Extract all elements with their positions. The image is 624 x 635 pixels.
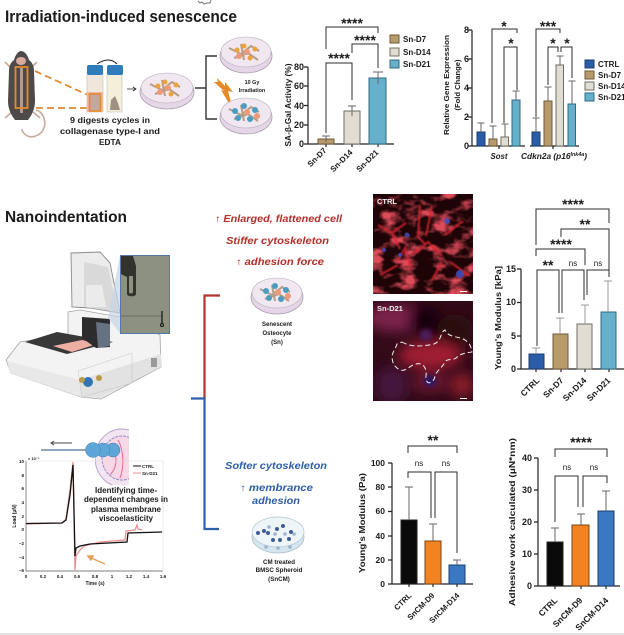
micrograph label CTRL: CTRL <box>377 197 397 206</box>
bars <box>547 511 614 586</box>
x labels <box>306 146 381 174</box>
significance brackets <box>492 18 572 123</box>
bracket: senescent branch <box>204 296 220 399</box>
caption: digest cycles: EDTA <box>99 137 121 147</box>
legend <box>133 464 158 476</box>
retraction arrow <box>51 441 72 445</box>
significance brackets: **** <box>354 32 376 48</box>
y axis ticks: 40 <box>294 101 304 111</box>
legend: senescence days: Sn-D21 <box>403 60 431 69</box>
icon: tubes <box>87 60 123 112</box>
indenter head <box>82 317 110 348</box>
text: spheroid phenotype: ↑ membrance <box>240 483 313 494</box>
micrograph: Sn-D21 <box>373 301 473 401</box>
y axis ticks: 40 <box>376 531 385 541</box>
caption: BMSC spheroid: (SnCM) <box>268 576 290 583</box>
x ticks: 1.4 <box>143 574 150 579</box>
caption: senescent osteocyte: Senescent <box>262 322 292 328</box>
significance brackets: ** <box>543 257 554 273</box>
y ticks: −6 <box>19 568 24 573</box>
legend: senescence days <box>390 35 431 69</box>
error bars <box>405 487 461 565</box>
error bars <box>551 491 610 542</box>
bracket: spheroid branch <box>191 398 219 529</box>
y axis ticks: 20 <box>522 517 532 527</box>
caption: BMSC spheroid: CM treated <box>263 559 295 566</box>
y axis ticks: 15 <box>506 264 516 274</box>
significance brackets: **** <box>341 15 363 31</box>
panel: isolation workflow <box>5 37 272 147</box>
y axis ticks: 80 <box>376 482 385 492</box>
significance brackets <box>555 434 607 522</box>
icon: control dish <box>220 37 272 73</box>
significance brackets: **** <box>550 236 572 252</box>
bar chart: Young's modulus Pa <box>358 432 473 625</box>
significance brackets: ** <box>428 432 439 448</box>
text: spheroid phenotype: adhesion <box>252 496 300 507</box>
icon: culture dish <box>140 73 194 109</box>
y axis ticks: 40 <box>522 453 532 463</box>
bars <box>477 65 576 146</box>
y axis ticks: 20 <box>376 555 385 565</box>
significance brackets: *** <box>540 18 557 34</box>
y axis ticks <box>464 25 469 151</box>
y axis ticks: 10 <box>506 297 516 307</box>
y axis ticks: 0 <box>380 579 385 589</box>
significance brackets: ** <box>580 216 591 232</box>
text: senescent phenotype: ↑ Enlarged, flattened cell <box>215 214 342 225</box>
y axis ticks <box>506 264 516 374</box>
bars <box>401 520 465 584</box>
y axis label: (Fold Change) <box>453 59 462 111</box>
caption: digest cycles <box>60 115 160 147</box>
connectors <box>83 377 93 387</box>
line chart: load versus time: Load (µN) <box>12 504 18 528</box>
caption: BMSC spheroid: BMSC Spheroid <box>256 567 303 574</box>
x ticks: 0.6 <box>74 574 81 579</box>
zoom wedge <box>108 255 120 333</box>
micrograph label Sn-D21: Sn-D21 <box>377 304 403 313</box>
text: senescent phenotype <box>215 214 342 268</box>
significance brackets: ns <box>590 463 598 472</box>
significance brackets: **** <box>328 50 350 66</box>
x labels <box>491 152 587 161</box>
series: Sn-D21 <box>26 462 142 570</box>
significance brackets <box>408 432 457 553</box>
y axis ticks: 4 <box>464 83 469 93</box>
significance brackets: ns <box>563 463 571 472</box>
x labels: CTRL <box>536 595 559 618</box>
error bars <box>478 56 576 139</box>
arrow to dish <box>127 87 136 91</box>
y axis ticks: 2 <box>464 112 469 122</box>
y ticks: −2 <box>19 541 24 546</box>
y axis ticks: 0 <box>511 364 516 374</box>
y ticks: 2 <box>21 514 24 519</box>
text: senescent phenotype: ↑ adhesion force <box>236 257 324 268</box>
inset microscope view <box>120 256 170 334</box>
y axis ticks: 60 <box>294 81 304 91</box>
caption: senescent osteocyte: Osteocyte <box>262 331 292 337</box>
x labels: SnCM-D9 <box>406 591 437 622</box>
caption: viscoelasticity: viscoelasticity <box>99 514 154 523</box>
error bars <box>322 72 383 142</box>
x labels: SnCM-D14 <box>427 591 462 625</box>
sample deck <box>25 332 113 354</box>
y axis ticks: 6 <box>464 54 469 64</box>
x labels: Cdkn2a (p16 <box>521 152 567 161</box>
caption: viscoelasticity: plasma membrane <box>91 505 162 514</box>
line chart: load versus time: × 10⁻³ <box>28 456 40 461</box>
legend: gene expression groups <box>585 60 624 102</box>
x labels: Sn-D21 <box>355 148 381 174</box>
icon: lightning bolt <box>214 78 233 110</box>
significance brackets <box>326 15 378 133</box>
icon: BMSC spheroid dish <box>252 517 304 553</box>
series: CTRL <box>26 465 162 556</box>
x labels: ) <box>583 152 587 161</box>
dashed lines from mouse to tube <box>35 71 88 108</box>
x labels: Sn-D14 <box>329 148 355 174</box>
x labels: Ink4a <box>571 152 584 158</box>
caption: BMSC spheroid <box>256 559 303 583</box>
y axis ticks <box>294 62 304 149</box>
icon: mouse <box>5 51 45 137</box>
y axis ticks: 0 <box>527 581 532 591</box>
y ticks: 4 <box>21 500 24 505</box>
significance brackets: * <box>564 35 570 51</box>
y axis ticks: 20 <box>294 120 304 130</box>
bar chart: adhesive work <box>507 434 620 632</box>
y axis ticks: 80 <box>294 62 304 72</box>
y ticks: −4 <box>19 555 24 560</box>
label: 10 Gy irradiation <box>239 80 265 94</box>
dashed cell outline <box>392 330 472 383</box>
cell <box>95 428 129 485</box>
x ticks: 0.2 <box>40 574 47 579</box>
icon: irradiated dish <box>220 98 272 134</box>
x ticks: 1.2 <box>126 574 133 579</box>
x labels: SnCM-D9 <box>551 595 585 629</box>
bar chart: relative gene expression <box>442 18 587 161</box>
y axis ticks: 60 <box>376 506 385 516</box>
x labels <box>392 591 462 625</box>
title: irradiation-induced senescence: Irradiation-induced senescence <box>5 7 237 26</box>
error bars <box>532 281 612 354</box>
significance brackets: ns <box>442 459 450 468</box>
y axis ticks: 8 <box>464 25 469 35</box>
y axis ticks: 0 <box>464 141 469 151</box>
y axis label: Relative Gene Expression <box>442 35 451 135</box>
significance brackets: ns <box>415 459 423 468</box>
y ticks <box>19 459 24 573</box>
y axis ticks: 30 <box>522 485 532 495</box>
y axis label: Young's Modulus (Pa) <box>358 473 367 573</box>
line chart: load versus time <box>12 456 167 587</box>
x labels: SnCM-D14 <box>573 595 611 632</box>
probe <box>41 449 90 451</box>
x labels: Sn-D7 <box>541 375 566 400</box>
y axis ticks: 100 <box>371 458 385 468</box>
icon: senescent osteocyte dish <box>251 278 303 314</box>
y axis label <box>442 35 462 135</box>
x labels: Sn-D14 <box>561 375 589 403</box>
y axis ticks: 5 <box>511 331 516 341</box>
micrograph: CTRL <box>373 194 473 294</box>
y axis label: SA-β-Gal Activity (%) <box>284 63 293 146</box>
text: spheroid phenotype: Softer cytoskeleton <box>225 461 327 472</box>
axis labels: Time (s) <box>85 581 105 587</box>
x labels: CTRL <box>518 375 541 398</box>
label: 10 Gy irradiation: 10 Gy <box>245 80 259 86</box>
instrument body <box>6 310 161 399</box>
caption: viscoelasticity: dependent changes in <box>84 495 168 504</box>
x ticks: 0.4 <box>57 574 64 579</box>
decorative artifact at top <box>198 0 211 4</box>
y ticks: 6 <box>21 486 24 491</box>
x ticks: 1 <box>111 574 114 579</box>
legend: senescence days: Sn-D7 <box>403 35 427 44</box>
label: 10 Gy irradiation: Irradiation <box>239 88 265 94</box>
instrument lid <box>71 252 120 313</box>
legend: CTRL <box>142 464 154 469</box>
legend: senescence days: Sn-D14 <box>403 48 431 57</box>
x labels: Sn-D7 <box>306 146 329 169</box>
significance brackets: **** <box>562 196 584 212</box>
significance brackets: ns <box>569 259 577 268</box>
x labels <box>536 595 611 632</box>
significance brackets: * <box>508 35 514 51</box>
legend: Sn-D21 <box>142 471 158 476</box>
bracket to treatment groups <box>195 56 217 119</box>
x labels <box>518 375 613 403</box>
caption: digest cycles: 9 digests cycles in <box>70 115 150 125</box>
x labels: Sost <box>491 152 508 161</box>
x labels: CTRL <box>392 591 414 612</box>
significance brackets: **** <box>570 434 592 450</box>
y axis ticks <box>522 453 532 591</box>
x ticks: 1.6 <box>160 574 167 579</box>
arrow: adhesion event <box>88 556 105 564</box>
caption: senescent osteocyte <box>262 322 292 346</box>
x ticks <box>25 574 167 579</box>
illustration: nanoindenter instrument <box>6 252 170 399</box>
heading: nanoindentation: Nanoindentation <box>5 209 127 226</box>
x ticks: 0 <box>25 574 28 579</box>
illustration: retracting bead probe on cell <box>41 428 129 485</box>
significance brackets: * <box>550 35 556 51</box>
caption: digest cycles: collagenase type-I and <box>60 126 160 136</box>
y ticks: 0 <box>21 527 24 532</box>
y axis ticks: 10 <box>522 549 532 559</box>
y ticks: 8 <box>21 473 24 478</box>
x labels: Sn-D21 <box>585 375 613 403</box>
significance brackets <box>536 196 609 346</box>
caption: viscoelasticity: Identifying time- <box>95 486 157 495</box>
y ticks: 10 <box>19 459 24 464</box>
caption: viscoelasticity <box>84 486 168 523</box>
bar chart: Young's modulus kPa <box>493 196 624 403</box>
x ticks: 0.8 <box>92 574 99 579</box>
legend: gene expression groups: CTRL <box>598 60 619 69</box>
bar chart: SA-beta-Gal activity <box>284 15 394 174</box>
bars <box>529 312 616 369</box>
y axis ticks <box>371 458 385 589</box>
y axis ticks: 0 <box>299 139 304 149</box>
text: spheroid phenotype <box>225 461 327 507</box>
bars <box>318 78 386 144</box>
y axis label: Adhesive work calculated (µN*nm) <box>507 438 517 606</box>
caption: senescent osteocyte: (Sn) <box>271 340 283 346</box>
y axis label: Young's Modulus [kPa] <box>493 266 503 370</box>
significance brackets: * <box>501 18 507 34</box>
text: senescent phenotype: Stiffer cytoskeleton <box>226 236 329 247</box>
significance brackets: ns <box>594 259 602 268</box>
legend: gene expression groups: Sn-D7 <box>598 71 622 80</box>
